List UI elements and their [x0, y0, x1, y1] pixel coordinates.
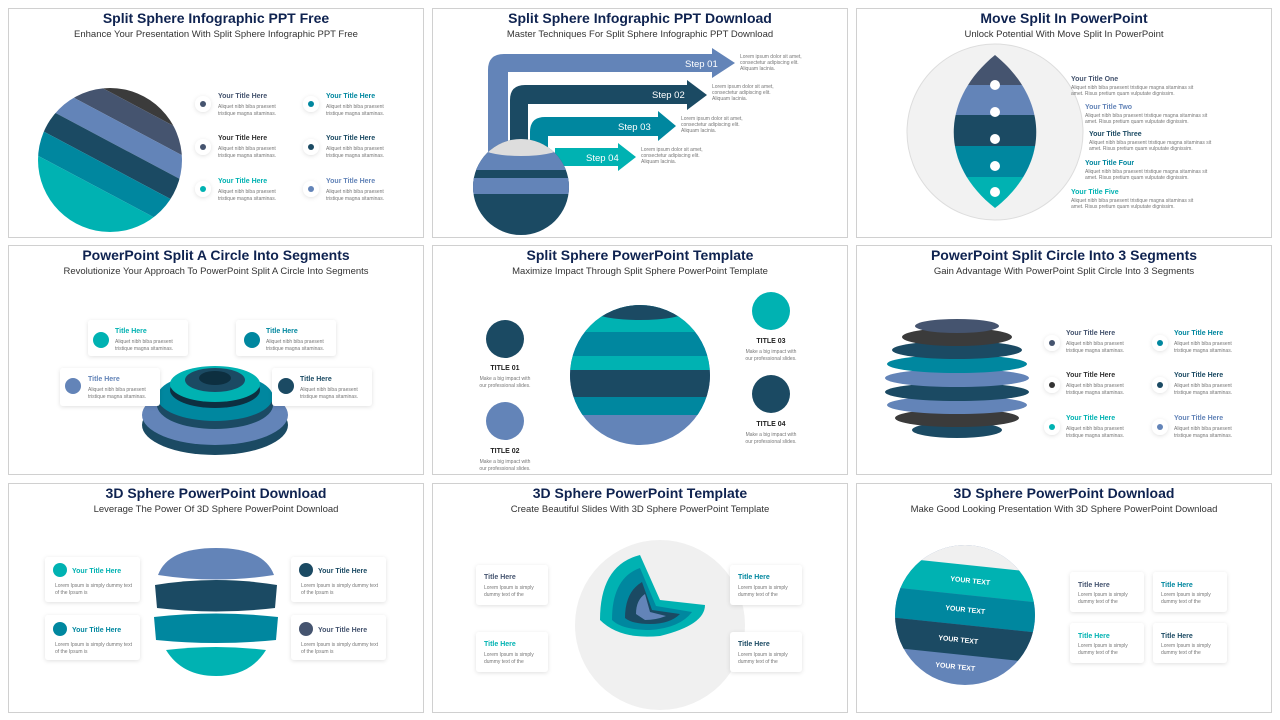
- cards: dummy text of the: [738, 659, 778, 665]
- title: 3D Sphere PowerPoint Download: [106, 485, 326, 501]
- step arrows: Step 03: [618, 122, 651, 133]
- cards: Lorem Ipsum is simply: [484, 652, 534, 658]
- cards: tristique magna sitaminas.: [300, 394, 358, 400]
- title: 3D Sphere PowerPoint Download: [954, 485, 1174, 501]
- list items: tristique magna sitaminas.: [326, 196, 384, 202]
- list: Your Title Three: [1089, 131, 1142, 138]
- icons and titles: Make a big impact with: [480, 459, 531, 465]
- list: Aliquet nibh biba praesent tristique magna sitaminas sit: [1071, 198, 1194, 204]
- cards: Title Here: [484, 641, 516, 648]
- list: amet. Risus pretium quam vulputate dignissim.: [1085, 119, 1189, 125]
- cards: dummy text of the: [1161, 599, 1201, 605]
- cards: Title Here: [1078, 633, 1110, 640]
- step arrows: Step 04: [586, 153, 619, 164]
- subtitle: Unlock Potential With Move Split In PowerPoint: [964, 29, 1164, 40]
- list: Aliquet nibh biba praesent tristique magna sitaminas sit: [1089, 140, 1212, 146]
- cards: Lorem Ipsum is simply dummy text: [55, 642, 133, 648]
- icons and titles: TITLE 01: [490, 365, 520, 372]
- cards: of the Ipsum is: [301, 649, 334, 655]
- lens graphic: [907, 44, 1083, 220]
- list items: Your Title Here: [218, 178, 267, 185]
- title: PowerPoint Split Circle Into 3 Segments: [931, 247, 1197, 263]
- cards: [476, 565, 802, 672]
- list items: tristique magna sitaminas.: [326, 111, 384, 117]
- cards: Aliquet nibh biba praesent: [300, 387, 358, 393]
- cards: of the Ipsum is: [55, 590, 88, 596]
- step texts: consectetur adipiscing elit.: [740, 60, 799, 66]
- cards: Aliquet nibh biba praesent: [88, 387, 146, 393]
- cards: Lorem Ipsum is simply dummy text: [301, 642, 379, 648]
- list items: Aliquet nibh biba praesent: [326, 146, 384, 152]
- cards: dummy text of the: [1078, 599, 1118, 605]
- list: Your Title Here: [1066, 330, 1115, 337]
- cards: Lorem Ipsum is simply dummy text: [55, 583, 133, 589]
- subtitle: Leverage The Power Of 3D Sphere PowerPoint Download: [94, 504, 338, 515]
- list items: Your Title Here: [218, 93, 267, 100]
- list items: Your Title Here: [326, 178, 375, 185]
- list: Your Title Here: [1066, 415, 1115, 422]
- split sphere slices: [154, 548, 278, 676]
- list: tristique magna sitaminas.: [1174, 433, 1232, 439]
- subtitle: Revolutionize Your Approach To PowerPoint Split A Circle Into Segments: [63, 266, 369, 277]
- step texts: Aliquam lacinia.: [641, 159, 676, 165]
- list items: Aliquet nibh biba praesent: [218, 104, 276, 110]
- cards: Title Here: [1161, 582, 1193, 589]
- list: Aliquet nibh biba praesent: [1174, 383, 1232, 389]
- list: [1044, 330, 1232, 439]
- icons and titles: TITLE 03: [756, 338, 786, 345]
- title: Split Sphere Infographic PPT Download: [508, 10, 772, 26]
- cards: Lorem Ipsum is simply: [1078, 592, 1128, 598]
- sphere graphic: [38, 88, 182, 232]
- cards: Title Here: [300, 376, 332, 383]
- list items: Your Title Here: [326, 135, 375, 142]
- step texts: Aliquam lacinia.: [712, 96, 747, 102]
- panel: split circle into segments: [8, 246, 424, 474]
- list: Aliquet nibh biba praesent: [1174, 341, 1232, 347]
- subtitle: Maximize Impact Through Split Sphere PowerPoint Template: [512, 266, 768, 277]
- title: 3D Sphere PowerPoint Template: [533, 485, 747, 501]
- list: Aliquet nibh biba praesent: [1066, 426, 1124, 432]
- list: Your Title Here: [1174, 372, 1223, 379]
- cards: [60, 320, 372, 406]
- list: Aliquet nibh biba praesent: [1174, 426, 1232, 432]
- panel: split sphere download steps: [432, 8, 848, 245]
- cards: Title Here: [738, 574, 770, 581]
- cards: Lorem Ipsum is simply: [1161, 643, 1211, 649]
- list items: Aliquet nibh biba praesent: [326, 189, 384, 195]
- list items: tristique magna sitaminas.: [218, 196, 276, 202]
- list: Your Title Here: [1066, 372, 1115, 379]
- cards: Your Title Here: [72, 568, 121, 575]
- cards: Title Here: [484, 574, 516, 581]
- banded sphere: YOUR TEXT: [938, 635, 979, 646]
- step texts: consectetur adipiscing elit.: [712, 90, 771, 96]
- list items: Aliquet nibh biba praesent: [326, 104, 384, 110]
- cards: dummy text of the: [1078, 650, 1118, 656]
- stacked rings: [142, 366, 288, 455]
- cards: Lorem Ipsum is simply: [484, 585, 534, 591]
- cut sphere: [575, 540, 745, 710]
- subtitle: Make Good Looking Presentation With 3D Sphere PowerPoint Download: [911, 504, 1217, 515]
- list: Your Title Four: [1085, 160, 1134, 167]
- list: Your Title Here: [1174, 330, 1223, 337]
- subtitle: Create Beautiful Slides With 3D Sphere PowerPoint Template: [511, 504, 769, 515]
- panel: split circle into 3 segments: [856, 246, 1272, 474]
- panel: 3D sphere download your text: [856, 484, 1272, 712]
- step arrows: Step 02: [652, 90, 685, 101]
- icons and titles: Make a big impact with: [746, 432, 797, 438]
- list: tristique magna sitaminas.: [1066, 433, 1124, 439]
- icons and titles: TITLE 02: [490, 448, 520, 455]
- panel: split sphere template: [432, 246, 848, 474]
- icons and titles: [479, 292, 797, 472]
- sphere: [570, 305, 710, 445]
- step texts: Lorem ipsum dolor sit amet,: [740, 54, 802, 60]
- disc stack: [885, 319, 1029, 438]
- title: Split Sphere Infographic PPT Free: [103, 10, 329, 26]
- icons and titles: our professional slides.: [479, 466, 531, 472]
- list: [1071, 76, 1212, 210]
- panel: split sphere infographic free: [8, 8, 424, 238]
- step texts: Lorem ipsum dolor sit amet,: [641, 147, 703, 153]
- list: tristique magna sitaminas.: [1174, 348, 1232, 354]
- banded sphere: [895, 545, 1035, 685]
- step texts: Aliquam lacinia.: [740, 66, 775, 72]
- cards: of the Ipsum is: [55, 649, 88, 655]
- list items: tristique magna sitaminas.: [326, 153, 384, 159]
- list: Aliquet nibh biba praesent: [1066, 341, 1124, 347]
- icons and titles: TITLE 04: [756, 421, 786, 428]
- cards: Your Title Here: [72, 627, 121, 634]
- step arrows: [488, 48, 735, 171]
- icons and titles: our professional slides.: [745, 356, 797, 362]
- cards: [45, 557, 386, 660]
- cards: Lorem Ipsum is simply: [1078, 643, 1128, 649]
- list: Aliquet nibh biba praesent tristique magna sitaminas sit: [1085, 113, 1208, 119]
- list items: Your Title Here: [218, 135, 267, 142]
- list items: [195, 93, 384, 202]
- banded sphere: YOUR TEXT: [935, 662, 976, 673]
- cards: tristique magna sitaminas.: [88, 394, 146, 400]
- cards: Title Here: [115, 328, 147, 335]
- cards: Lorem Ipsum is simply dummy text: [301, 583, 379, 589]
- cards: Lorem Ipsum is simply: [738, 585, 788, 591]
- list: Your Title One: [1071, 76, 1118, 83]
- cards: Title Here: [88, 376, 120, 383]
- list: tristique magna sitaminas.: [1174, 390, 1232, 396]
- list: amet. Risus pretium quam vulputate dignissim.: [1071, 91, 1175, 97]
- subtitle: Enhance Your Presentation With Split Sphere Infographic PPT Free: [74, 29, 358, 40]
- cards: [1070, 572, 1227, 663]
- banded sphere: YOUR TEXT: [950, 576, 991, 587]
- list: tristique magna sitaminas.: [1066, 348, 1124, 354]
- banded sphere: YOUR TEXT: [945, 605, 986, 616]
- list: Aliquet nibh biba praesent tristique magna sitaminas sit: [1085, 169, 1208, 175]
- list: amet. Risus pretium quam vulputate dignissim.: [1085, 175, 1189, 181]
- subtitle: Gain Advantage With PowerPoint Split Circle Into 3 Segments: [934, 266, 1194, 277]
- cards: Aliquet nibh biba praesent: [115, 339, 173, 345]
- cards: Aliquet nibh biba praesent: [266, 339, 324, 345]
- step texts: consectetur adipiscing elit.: [681, 122, 740, 128]
- panel: 3D sphere template: [432, 484, 848, 712]
- title: PowerPoint Split A Circle Into Segments: [82, 247, 350, 263]
- cards: Your Title Here: [318, 568, 367, 575]
- cards: dummy text of the: [1161, 650, 1201, 656]
- step texts: Lorem ipsum dolor sit amet,: [681, 116, 743, 122]
- cards: Title Here: [738, 641, 770, 648]
- list: tristique magna sitaminas.: [1066, 390, 1124, 396]
- list: Your Title Five: [1071, 189, 1119, 196]
- cards: tristique magna sitaminas.: [266, 346, 324, 352]
- panel: move split: [856, 8, 1272, 238]
- list: amet. Risus pretium quam vulputate dignissim.: [1089, 146, 1193, 152]
- icons and titles: Make a big impact with: [746, 349, 797, 355]
- list items: tristique magna sitaminas.: [218, 153, 276, 159]
- icons and titles: Make a big impact with: [480, 376, 531, 382]
- cards: dummy text of the: [738, 592, 778, 598]
- step texts: consectetur adipiscing elit.: [641, 153, 700, 159]
- icons and titles: our professional slides.: [745, 439, 797, 445]
- step arrows: Step 01: [685, 59, 718, 70]
- step texts: Aliquam lacinia.: [681, 128, 716, 134]
- list items: Your Title Here: [326, 93, 375, 100]
- subtitle: Master Techniques For Split Sphere Infographic PPT Download: [507, 29, 773, 40]
- list items: Aliquet nibh biba praesent: [218, 146, 276, 152]
- list: amet. Risus pretium quam vulputate dignissim.: [1071, 204, 1175, 210]
- cards: dummy text of the: [484, 592, 524, 598]
- list items: Aliquet nibh biba praesent: [218, 189, 276, 195]
- panel: 3D sphere download: [8, 484, 424, 712]
- list: Your Title Two: [1085, 104, 1132, 111]
- list items: tristique magna sitaminas.: [218, 111, 276, 117]
- cards: Lorem Ipsum is simply: [1161, 592, 1211, 598]
- list: Your Title Here: [1174, 415, 1223, 422]
- list: Aliquet nibh biba praesent: [1066, 383, 1124, 389]
- cards: Your Title Here: [318, 627, 367, 634]
- cards: of the Ipsum is: [301, 590, 334, 596]
- cards: tristique magna sitaminas.: [115, 346, 173, 352]
- icons and titles: our professional slides.: [479, 383, 531, 389]
- title: Move Split In PowerPoint: [980, 10, 1148, 26]
- cards: Lorem Ipsum is simply: [738, 652, 788, 658]
- cards: dummy text of the: [484, 659, 524, 665]
- cards: Title Here: [266, 328, 298, 335]
- sphere: [473, 139, 569, 235]
- step texts: [641, 54, 802, 165]
- list: Aliquet nibh biba praesent tristique magna sitaminas sit: [1071, 85, 1194, 91]
- step texts: Lorem ipsum dolor sit amet,: [712, 84, 774, 90]
- title: Split Sphere PowerPoint Template: [527, 247, 754, 263]
- cards: Title Here: [1161, 633, 1193, 640]
- cards: Title Here: [1078, 582, 1110, 589]
